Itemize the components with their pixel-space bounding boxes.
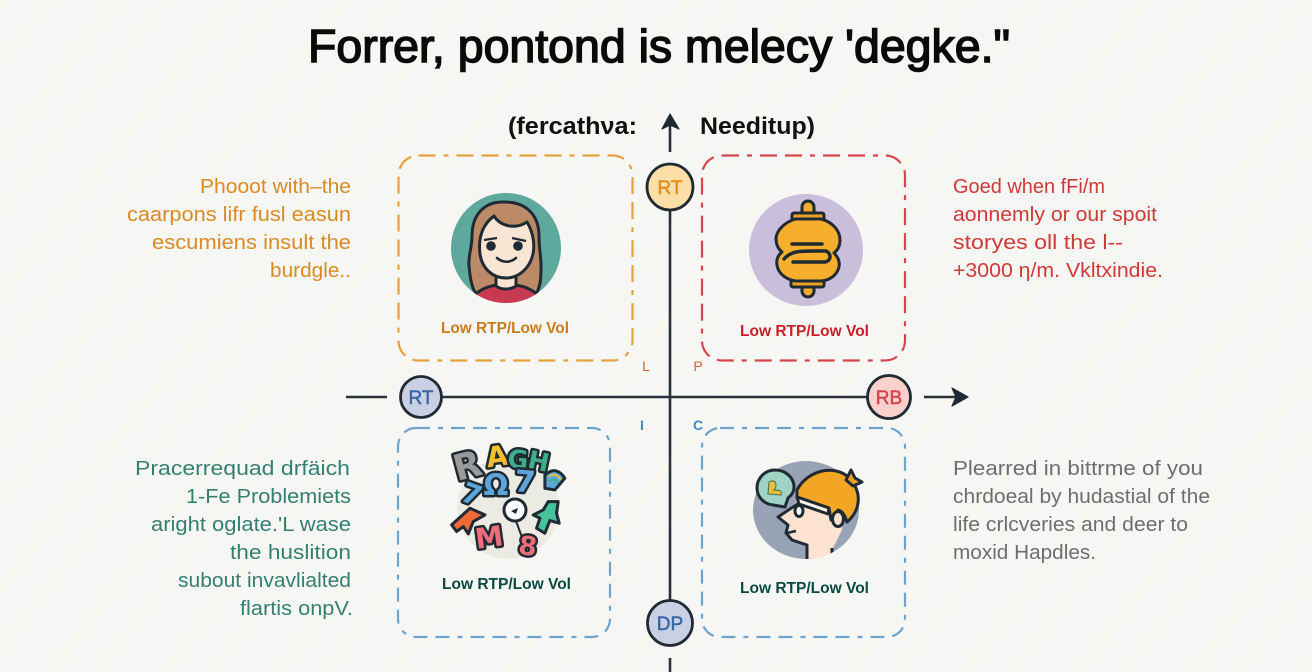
text block: bottom-right description: chrdoeal by hudastial of the xyxy=(953,486,1210,508)
text block: bottom-right description: Plearred in bittrme of you xyxy=(953,458,1203,480)
text block: bottom-right description: life crlcveries and deer to xyxy=(953,514,1188,536)
axis node: right RB: RB xyxy=(876,388,902,409)
icon: jumbled letters: 8 xyxy=(517,531,539,563)
icon part: rainbow shape xyxy=(545,471,565,490)
quadrant letter P: P xyxy=(693,358,703,374)
text block: top-right description: storyes oll the l-- xyxy=(953,232,1123,254)
text block: top-right description: Goed when fFi/m xyxy=(953,176,1105,198)
card label: Low RTP/Low Vol xyxy=(740,323,869,340)
icon: jumbled letters xyxy=(449,439,565,563)
quadrant letter L: L xyxy=(642,358,650,374)
icon part: orange arrow shape xyxy=(452,508,485,534)
text block: bottom-left description xyxy=(135,458,353,620)
axis node: bottom DP: DP xyxy=(657,614,683,635)
text block: bottom-left description: flartis onpV. xyxy=(240,598,353,620)
text block: bottom-left description: Pracerrequad drfäich xyxy=(135,458,350,480)
text block: top-right description: +3000 η/m. Vkltxindie. xyxy=(953,260,1163,282)
icon: jumbled letters: 7 xyxy=(513,464,537,501)
horizontal axis with arrow xyxy=(346,388,968,406)
text block: top-left description: Phooot with–the xyxy=(200,176,351,198)
vertical axis with arrow xyxy=(662,114,679,672)
text block: top-left description: burdgle.. xyxy=(270,260,351,282)
icon: jumbled letters: A xyxy=(484,439,510,474)
axis node: top RT: RT xyxy=(658,178,683,199)
icon: jumbled letters: R xyxy=(449,443,486,490)
card label: Low RTP/Low Vol xyxy=(442,576,571,593)
text block: bottom-right description: moxid Hapdles. xyxy=(953,542,1096,564)
panel: bottom-left quadrant xyxy=(398,428,610,637)
icon: jumbled letters: G xyxy=(507,444,529,475)
icon: jumbled letters: M xyxy=(473,519,505,556)
icon: woman portrait xyxy=(451,193,561,312)
quadrant letter C: C xyxy=(693,417,703,433)
text block: bottom-left description: the huslition xyxy=(230,542,351,564)
icon: jumbled letters: 7 xyxy=(457,476,486,513)
axis node: bottom DP xyxy=(648,600,692,646)
icon: jumbled letters: H xyxy=(525,445,552,478)
axis node: top RT xyxy=(647,164,693,210)
icon: money bag xyxy=(749,194,863,306)
title: Forrer, pontond is melecy 'degke." xyxy=(308,20,1010,72)
card label: Low RTP/Low Vol xyxy=(740,580,869,597)
axis heading: left: (fercathνa: xyxy=(508,113,637,140)
text block: bottom-left description: 1-Fe Problemiets xyxy=(186,486,351,508)
axis heading: right: Needitup) xyxy=(700,113,815,140)
axis node: left RT: RT xyxy=(409,388,434,409)
text block: top-right description: aonnemly or our spoit xyxy=(953,204,1157,226)
panel: top-right quadrant xyxy=(702,156,905,360)
panel: bottom-right quadrant xyxy=(702,428,905,637)
text block: top-left description: escumiens insult the xyxy=(152,232,351,254)
text block: bottom-right description xyxy=(953,458,1210,564)
text block: top-left description: caarpons lifr fusl easun xyxy=(127,204,351,226)
icon part: green cross shape xyxy=(533,502,559,533)
card label: Low RTP/Low Vol xyxy=(441,320,569,337)
quadrant letter I: I xyxy=(640,417,644,433)
axis node: right RB xyxy=(868,376,910,418)
text block: bottom-left description: subout invavlialted xyxy=(178,570,351,592)
icon: jumbled letters: Ω xyxy=(484,468,508,502)
text block: top-right description xyxy=(953,176,1163,282)
axis node: left RT xyxy=(400,376,442,418)
panel: top-left quadrant xyxy=(398,156,632,360)
icon: thinking person xyxy=(753,461,862,565)
text block: top-left description xyxy=(127,176,351,282)
text block: bottom-left description: aright oglate.'L wase xyxy=(151,514,351,536)
